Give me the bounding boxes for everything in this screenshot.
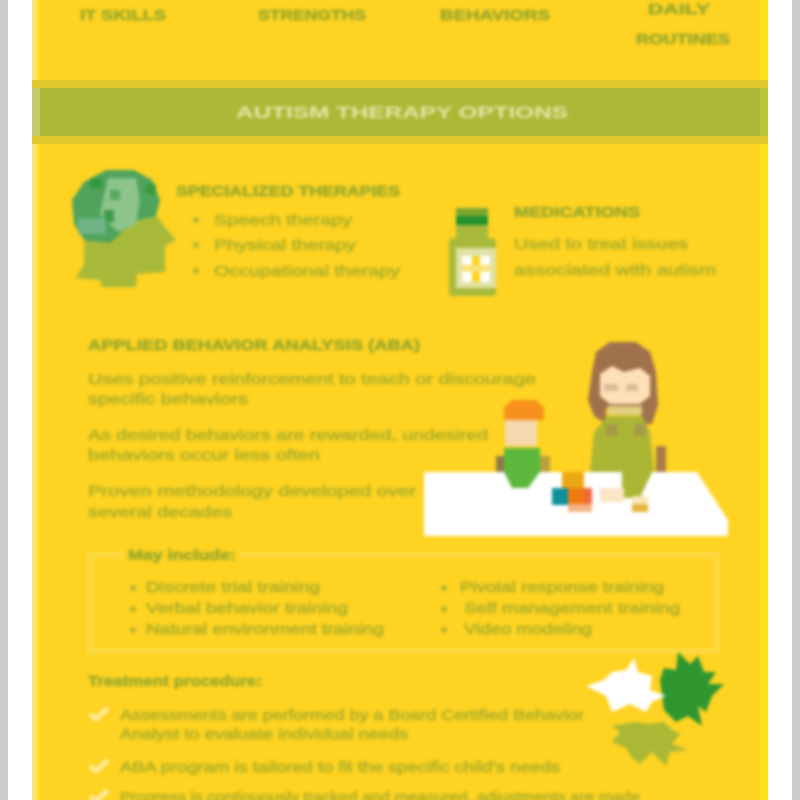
icon: puzzle splats: [586, 652, 724, 766]
text block: treatment procedure: Analyst to evaluate individual needs: [120, 726, 408, 743]
text block: specialized therapies: Occupational therapy: [214, 263, 401, 280]
panel: may include: [90, 547, 717, 651]
section banner: autism therapy options: [32, 80, 768, 144]
illustration: therapist and child at table: [424, 342, 728, 536]
blocks: [552, 488, 568, 505]
icon: medicine bottle: [449, 208, 496, 296]
text block: applied behavior analysis: several decades: [88, 504, 232, 521]
icon: check: [90, 760, 108, 771]
text block: specialized therapies: [176, 183, 401, 280]
text block: medications: Used to treat issues: [514, 236, 688, 253]
white splat: [586, 658, 666, 712]
top labels: [80, 1, 730, 48]
panel: may include: Video modeling: [464, 621, 592, 638]
text block: applied behavior analysis: specific behaviors: [88, 391, 248, 408]
text block: treatment procedure: ABA program is tailored to fit the specific child's needs: [120, 759, 560, 776]
panel: may include: Verbal behavior training: [146, 600, 348, 617]
top labels: STRENGTHS: [258, 7, 366, 24]
child: [496, 400, 550, 474]
icon: check: [90, 708, 108, 719]
top labels: ROUTINES: [636, 31, 730, 48]
text block: specialized therapies: Speech therapy: [214, 212, 353, 229]
top labels: BEHAVIORS: [440, 7, 550, 24]
text block: medications: associated with autism: [514, 262, 716, 279]
text block: applied behavior analysis: Uses positive reinforcement to teach or discourage: [88, 371, 536, 388]
panel: may include: Natural environment training: [146, 621, 384, 638]
panel: may include: Self management training: [464, 600, 680, 617]
section banner: autism therapy options: AUTISM THERAPY OPTIONS: [236, 103, 568, 122]
table: [424, 472, 728, 536]
top labels: DAILY: [648, 1, 710, 18]
top labels: IT SKILLS: [80, 7, 166, 24]
text block: applied behavior analysis: Proven methodology developed over: [88, 483, 416, 500]
text block: specialized therapies: SPECIALIZED THERAPIES: [176, 183, 400, 200]
text block: applied behavior analysis: [88, 337, 536, 521]
therapist: [588, 342, 666, 498]
olive splat: [612, 722, 688, 766]
dark green splat: [660, 652, 724, 726]
text block: treatment procedure: Treatment procedure:: [88, 673, 262, 690]
text block: treatment procedure: Assessments are performed by a Board Certified Behavior: [120, 707, 584, 724]
text block: medications: MEDICATIONS: [514, 204, 640, 221]
text block: treatment procedure: [88, 673, 640, 800]
text block: specialized therapies: Physical therapy: [214, 237, 357, 254]
icon: head with brain: [72, 170, 176, 287]
text block: applied behavior analysis: behaviors occur less often: [88, 447, 320, 464]
icon: check: [90, 790, 108, 800]
panel: may include: Discrete trial training: [146, 579, 320, 596]
text block: applied behavior analysis: As desired behaviors are rewarded, undesired: [88, 427, 488, 444]
panel: may include: Pivotal response training: [460, 579, 664, 596]
panel: may include: May include:: [128, 547, 236, 564]
text block: applied behavior analysis: APPLIED BEHAVIOR ANALYSIS (ABA): [88, 337, 420, 354]
text block: medications: [514, 204, 716, 279]
